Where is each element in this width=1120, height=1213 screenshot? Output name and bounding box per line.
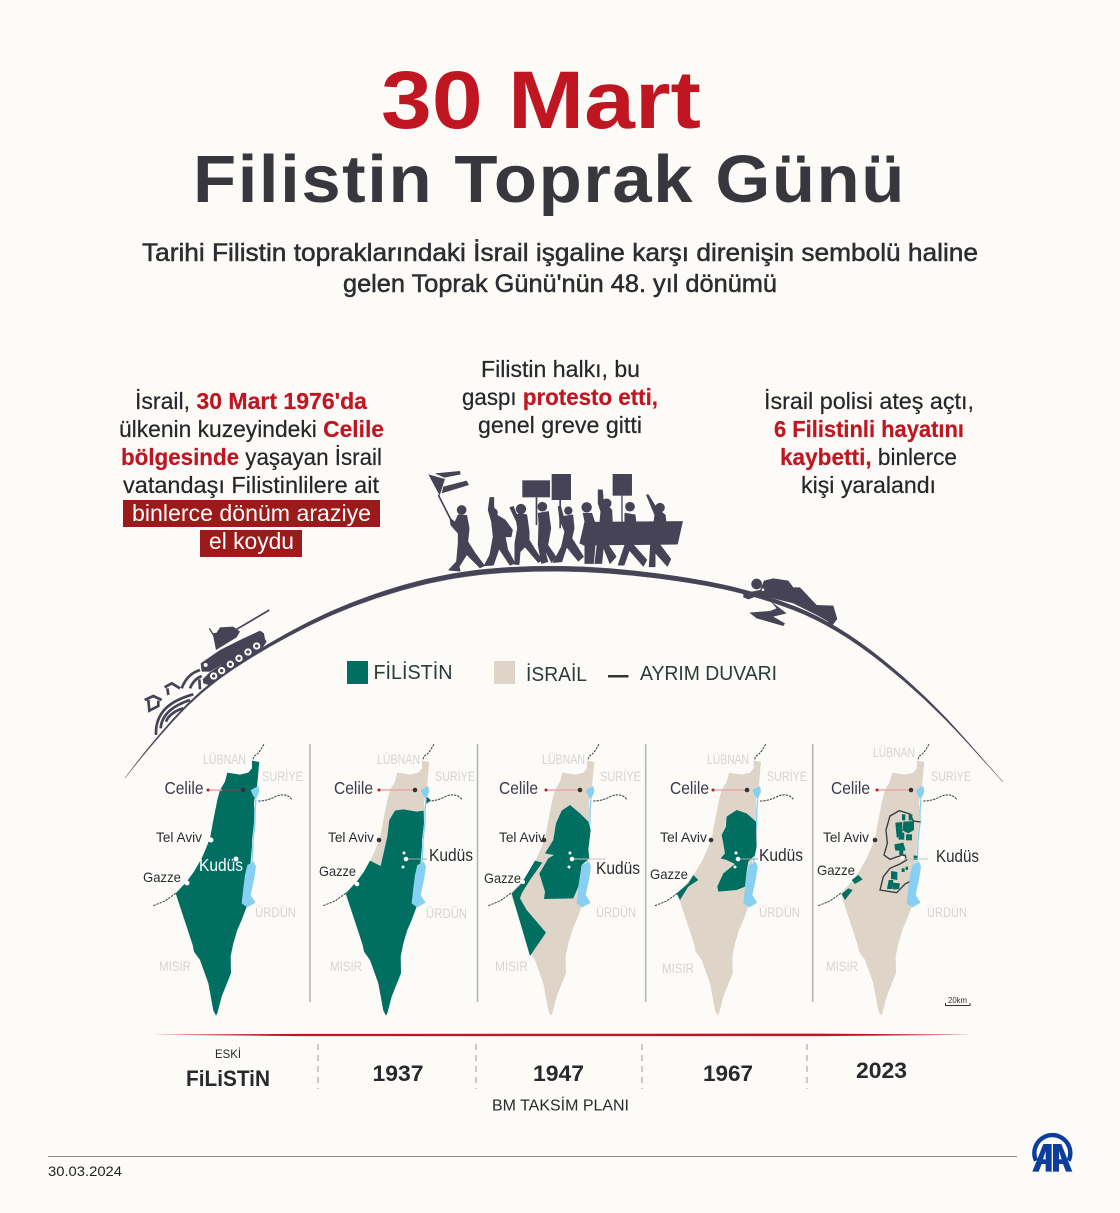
map: 2023: Gazze	[817, 862, 855, 878]
subtitle	[142, 238, 978, 298]
text block: left, land seizure: bölgesinde yaşayan İsrail	[121, 444, 382, 470]
map: 2023: MISIR	[826, 959, 858, 974]
map: old Palestine: Tel Aviv	[156, 829, 202, 845]
text block: left, land seizure: vatandaşı Filistinlilere ait	[123, 472, 379, 498]
title: 30 Mart	[381, 55, 701, 146]
map: 1947 UN partition	[484, 743, 641, 1016]
year labels	[186, 1047, 907, 1114]
text block: right, casualties: kişi yaralandı	[801, 472, 936, 498]
year labels: 1967	[703, 1061, 753, 1086]
map: 2023: LÜBNAN	[873, 745, 915, 760]
map: 1967: Tel Aviv	[660, 829, 707, 845]
legend: FİLİSTİN	[374, 661, 452, 684]
map: 1937: SURİYE	[435, 769, 475, 784]
map: 1947 UN partition: LÜBNAN	[542, 752, 585, 767]
scale bar: 20km	[948, 995, 967, 1005]
year labels: BM TAKSİM PLANI	[492, 1096, 629, 1114]
subtitle: Tarihi Filistin topraklarındaki İsrail işgaline karşı direnişin sembolü haline	[142, 238, 978, 267]
map: 1967: Kudüs	[759, 845, 803, 865]
icon: protesters with flag and signs	[428, 471, 682, 571]
map: 1937: Celile	[334, 778, 373, 798]
map: 1967: Celile	[670, 778, 709, 798]
map: 1937: ÜRDÜN	[426, 906, 467, 921]
map: old Palestine: LÜBNAN	[203, 752, 246, 767]
map: 1937: LÜBNAN	[377, 752, 420, 767]
map: old Palestine: SURİYE	[262, 769, 303, 784]
map: 1937: Tel Aviv	[328, 829, 374, 845]
map: 1937: Kudüs	[429, 845, 473, 865]
year labels: 1947	[533, 1061, 584, 1086]
text block: centre, protest: Filistin halkı, bu	[481, 356, 640, 382]
legend	[347, 661, 777, 686]
map: 2023: SURİYE	[931, 769, 971, 784]
year labels: FiLiSTiN	[186, 1066, 270, 1091]
map: 1947 UN partition: ÜRDÜN	[596, 905, 636, 920]
text block: right, casualties	[764, 388, 974, 498]
map: 1967: ÜRDÜN	[759, 905, 800, 920]
map: old Palestine: Gazze	[143, 869, 181, 885]
icon: tank over houses	[145, 610, 269, 735]
year labels: 1937	[372, 1061, 424, 1086]
title: Filistin Toprak Günü	[193, 142, 906, 217]
map: 1967: SURİYE	[767, 769, 807, 784]
arc timeline curve	[125, 566, 1003, 782]
text block: left, land seizure: binlerce dönüm araziye	[132, 500, 371, 526]
text block: left, land seizure: el koydu	[209, 528, 294, 554]
text block: centre, protest	[462, 356, 658, 438]
text block: left, land seizure: ülkenin kuzeyindeki Celile	[119, 416, 384, 442]
map: 1967: MISIR	[662, 961, 694, 976]
map: 1967: LÜBNAN	[707, 752, 749, 767]
map: 1967: Gazze	[650, 866, 688, 882]
map: 2023: Kudüs	[936, 846, 979, 866]
map: old Palestine: Celile	[164, 778, 204, 798]
map: old Palestine	[143, 743, 303, 1016]
text block: right, casualties: İsrail polisi ateş açtı,	[764, 388, 974, 414]
map: 1937	[319, 743, 475, 1016]
legend: AYRIM DUVARI	[640, 663, 777, 685]
map: old Palestine: ÜRDÜN	[255, 905, 296, 920]
map: 2023	[817, 743, 979, 1016]
map: 2023: Tel Aviv	[823, 829, 869, 845]
map: 1947 UN partition: Celile	[499, 778, 538, 798]
text block: left, land seizure: İsrail, 30 Mart 1976'da	[135, 388, 368, 414]
map: 1947 UN partition: Gazze	[484, 870, 521, 886]
text block: centre, protest: gaspı protesto etti,	[462, 384, 658, 410]
date: 30.03.2024	[48, 1164, 123, 1179]
icon: fallen person	[743, 578, 837, 628]
icon: AA logo	[1032, 1135, 1072, 1172]
year labels: ESKİ	[215, 1047, 241, 1061]
map: 1947 UN partition: SURİYE	[600, 769, 641, 784]
text block: right, casualties: 6 Filistinli hayatını	[774, 416, 964, 442]
legend: İSRAİL	[526, 663, 587, 686]
title	[193, 55, 906, 217]
text block: left, land seizure	[119, 388, 384, 557]
map: 1937: Gazze	[319, 863, 356, 879]
map: 2023: Celile	[831, 778, 870, 798]
map: 1947 UN partition: Tel Aviv	[499, 829, 545, 845]
map: 1967	[650, 743, 807, 1016]
year labels: 2023	[856, 1058, 907, 1083]
text block: right, casualties: kaybetti, binlerce	[780, 444, 957, 470]
map: 1947 UN partition: MISIR	[495, 959, 528, 974]
map: 1937: MISIR	[330, 959, 362, 974]
map: old Palestine: MISIR	[159, 959, 191, 974]
map: old Palestine: Kudüs	[199, 855, 243, 875]
map: 2023: ÜRDÜN	[927, 905, 967, 920]
text block: centre, protest: genel greve gitti	[478, 412, 642, 438]
map: 1947 UN partition: Kudüs	[596, 858, 640, 878]
subtitle: gelen Toprak Günü'nün 48. yıl dönümü	[343, 270, 777, 298]
